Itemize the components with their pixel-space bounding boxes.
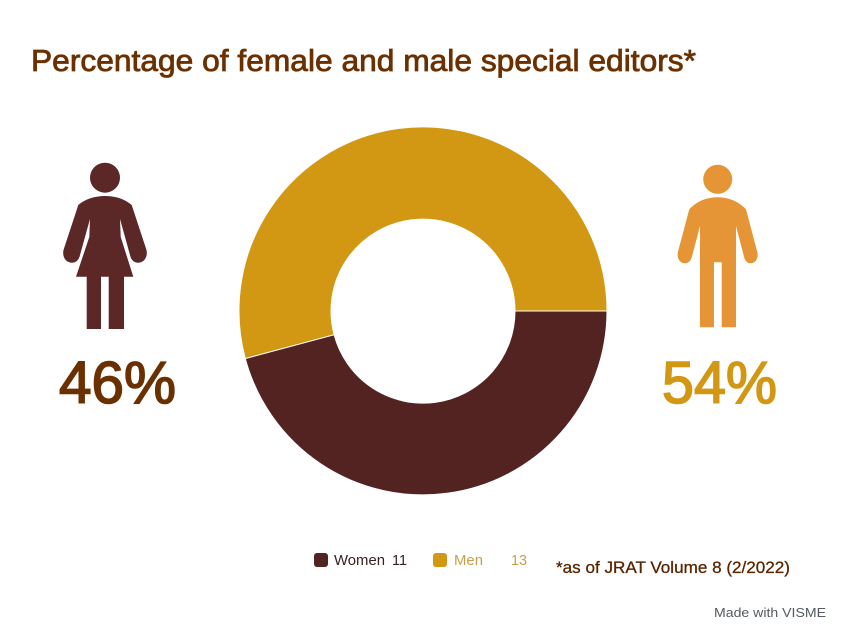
legend item: women: Women (334, 553, 385, 569)
stat: men 54%: 54% (662, 350, 777, 416)
icon: woman (63, 163, 147, 329)
legend item: men (433, 553, 527, 569)
legend item: women: 11 (392, 553, 407, 569)
title: Percentage of female and male special editors* (31, 43, 696, 78)
footnote: *as of JRAT Volume 8 (2/2022) (556, 559, 790, 577)
legend item: men: 13 (511, 553, 527, 569)
icon: man (678, 165, 758, 327)
segment: men 13 (239, 127, 607, 359)
watermark: Made with VISME (714, 605, 826, 620)
legend (314, 553, 527, 569)
donut chart (239, 127, 607, 495)
stat: women 46%: 46% (59, 350, 176, 416)
legend item: women (314, 553, 407, 569)
segment: women 11 (245, 311, 607, 495)
legend item: men: Men (454, 553, 483, 569)
